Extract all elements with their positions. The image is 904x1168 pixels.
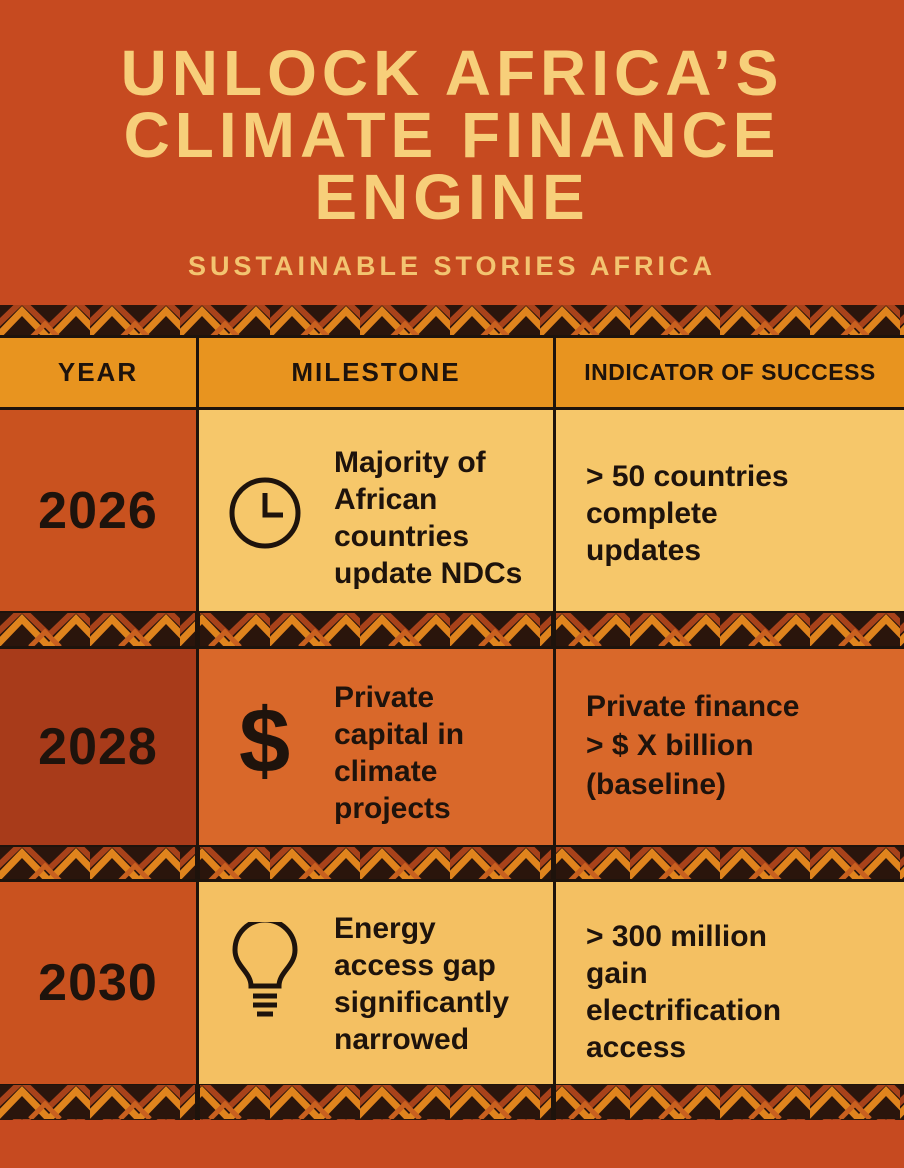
text: African: [334, 483, 437, 516]
indicator 2026: updates: [586, 534, 701, 567]
indicator 2030: [553, 879, 904, 1087]
icon: dollar: $: [239, 690, 290, 792]
year 2026: 2026: [38, 482, 158, 540]
text: Majority of: [334, 446, 486, 479]
pattern band top: [0, 305, 904, 335]
text: narrowed: [334, 1023, 469, 1056]
subtitle: SUSTAINABLE STORIES AFRICA: [188, 251, 716, 281]
text: [334, 446, 522, 590]
header: year: [0, 335, 199, 410]
header row: [0, 335, 904, 407]
text: climate: [334, 755, 437, 788]
pattern band bottom: [0, 1085, 904, 1120]
milestone 2026: [196, 407, 556, 614]
row 2028: [0, 646, 904, 847]
header: indicator: [553, 335, 904, 410]
indicator 2030: access: [586, 1031, 686, 1064]
indicator 2030: electrification: [586, 994, 781, 1027]
header: year: YEAR: [58, 357, 138, 387]
indicator 2028: (baseline): [586, 768, 726, 801]
indicator 2026: complete: [586, 497, 718, 530]
text: access gap: [334, 949, 496, 982]
icon: lightbulb: [232, 922, 298, 1016]
title: ENGINE: [314, 161, 590, 233]
row 2026: [0, 410, 904, 613]
title: CLIMATE FINANCE: [124, 99, 780, 171]
milestone 2028: [196, 646, 556, 848]
text: Energy: [334, 912, 436, 945]
header: milestone: MILESTONE: [291, 357, 461, 387]
text: projects: [334, 792, 451, 825]
pattern band 2: [0, 847, 904, 879]
year 2030: 2030: [38, 954, 158, 1012]
indicator 2026: > 50 countries: [586, 460, 789, 493]
indicator 2030: > 300 million: [586, 920, 767, 953]
year 2030: [0, 879, 199, 1087]
pattern band 1: [0, 613, 904, 646]
indicator 2026: [553, 407, 904, 614]
year 2028: 2028: [38, 718, 158, 776]
milestone 2030: [196, 879, 556, 1087]
year 2026: [0, 407, 199, 614]
text: [334, 912, 509, 1056]
header: indicator: INDICATOR OF SUCCESS: [584, 359, 876, 385]
header: milestone: [196, 335, 556, 410]
text: Private: [334, 681, 434, 714]
indicator 2028: Private finance: [586, 690, 799, 723]
text: capital in: [334, 718, 464, 751]
indicator 2028: [553, 646, 904, 848]
text: significantly: [334, 986, 509, 1019]
title: [121, 37, 783, 233]
text: update NDCs: [334, 557, 522, 590]
row 2030: [0, 879, 904, 1085]
icon: clock: [230, 478, 300, 548]
year 2028: [0, 646, 199, 848]
title: UNLOCK AFRICA’S: [121, 37, 783, 109]
text: [334, 681, 464, 825]
indicator 2030: gain: [586, 957, 648, 990]
text: countries: [334, 520, 469, 553]
indicator 2028: > $ X billion: [586, 729, 754, 762]
